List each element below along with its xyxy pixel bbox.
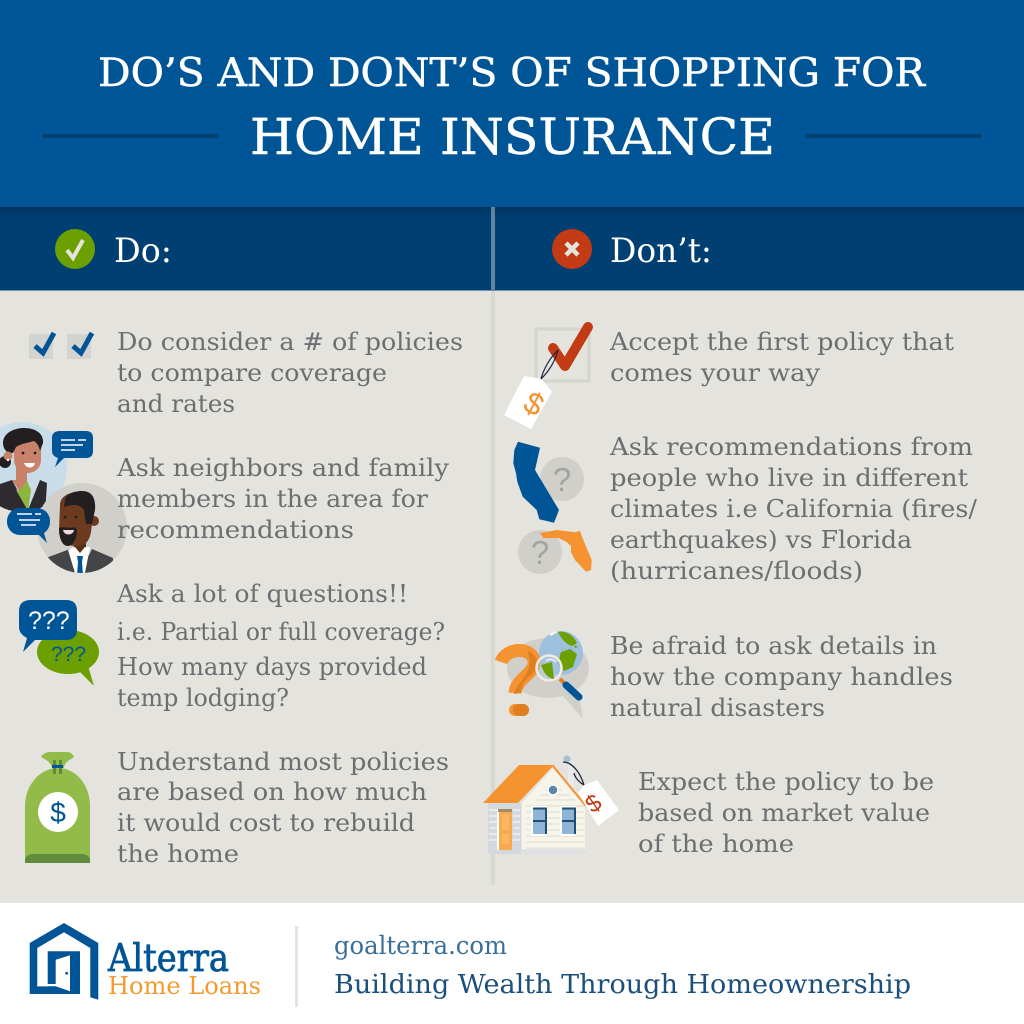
icon: house with price tag: $ [580, 789, 607, 819]
text: do consider policies: and rates [117, 390, 235, 418]
text: ask different climates: people who live in different [610, 464, 968, 492]
website and tagline: goalterra.com [334, 931, 507, 960]
text: ask neighbors [116, 454, 449, 544]
text: ask different climates [609, 433, 978, 585]
text: ask questions [116, 580, 445, 712]
text: ask questions: Ask a lot of questions!! [116, 580, 408, 608]
logo: Alterra Home Loans: Home Loans [108, 972, 261, 1000]
do heading: Do: [114, 231, 172, 271]
icon: question speech bubbles: ??? [28, 607, 70, 635]
icon: checkbox with price tag: $ [518, 384, 550, 423]
icon: California and Florida with question marks [513, 442, 592, 574]
text: be afraid: natural disasters [610, 694, 825, 722]
text: expect policy: Expect the policy to be [638, 768, 934, 796]
text: ask neighbors: recommendations [117, 516, 354, 544]
text: ask questions: temp lodging? [117, 684, 289, 712]
text: ask different climates: (hurricanes/floods) [610, 557, 863, 585]
logo: Alterra Home Loans [30, 923, 261, 1000]
text: do consider policies [117, 328, 463, 418]
text: ask different climates: climates i.e California (fires/ [610, 495, 978, 523]
icon: neighbors talking [0, 422, 127, 575]
icon: money bag: $ [50, 797, 66, 828]
icon: checkbox with price tag [504, 327, 589, 429]
text: understand policies: the home [117, 840, 239, 868]
column header band [0, 207, 1024, 291]
text: be afraid: how the company handles [610, 663, 953, 691]
text: do consider policies: Do consider a # of policies [117, 328, 463, 356]
icon: question mark, globe and magnifier [501, 631, 589, 719]
text: ask neighbors: Ask neighbors and family [116, 454, 449, 482]
text: expect policy [638, 768, 934, 858]
text: ask questions: How many days provided [117, 653, 427, 681]
text: ask neighbors: members in the area for [117, 485, 429, 513]
website and tagline [334, 931, 911, 1000]
icon: California and Florida with question marks: ? [553, 461, 571, 498]
dont heading: Don’t: [610, 231, 712, 271]
website and tagline: Building Wealth Through Homeownership [334, 970, 911, 1000]
icon: question speech bubbles [19, 600, 99, 686]
icon: question speech bubbles: ??? [51, 643, 86, 666]
title: HOME INSURANCE [250, 108, 775, 166]
icon: money bag [25, 752, 90, 863]
text: understand policies: it would cost to rebuild [117, 809, 415, 837]
footer [0, 903, 1024, 1024]
text: understand policies: are based on how much [117, 778, 427, 806]
text: be afraid: Be afraid to ask details in [610, 632, 937, 660]
text: ask different climates: earthquakes) vs Florida [610, 526, 912, 554]
text: accept first policy [609, 328, 954, 387]
text: accept first policy: Accept the first policy that [609, 328, 954, 356]
text: do consider policies: to compare coverage [117, 359, 387, 387]
icon: two checkboxes [29, 333, 92, 359]
do heading [55, 229, 172, 271]
text: expect policy: of the home [638, 830, 794, 858]
text: ask different climates: Ask recommendations from [609, 433, 973, 461]
title: DO’S AND DONT’S OF SHOPPING FOR [98, 51, 927, 96]
text: be afraid [610, 632, 953, 722]
dont heading [552, 229, 712, 271]
icon: house with price tag [483, 756, 619, 854]
title [98, 51, 927, 166]
text: ask questions: i.e. Partial or full coverage? [117, 618, 445, 646]
column divider [491, 207, 495, 885]
text: understand policies: Understand most policies [117, 748, 449, 776]
text: expect policy: based on market value [638, 799, 930, 827]
title banner [0, 0, 1024, 207]
text: accept first policy: comes your way [610, 359, 820, 387]
icon: California and Florida with question marks: ? [531, 534, 549, 571]
text: understand policies [117, 748, 449, 868]
logo: Alterra Home Loans: Alterra [107, 936, 229, 980]
